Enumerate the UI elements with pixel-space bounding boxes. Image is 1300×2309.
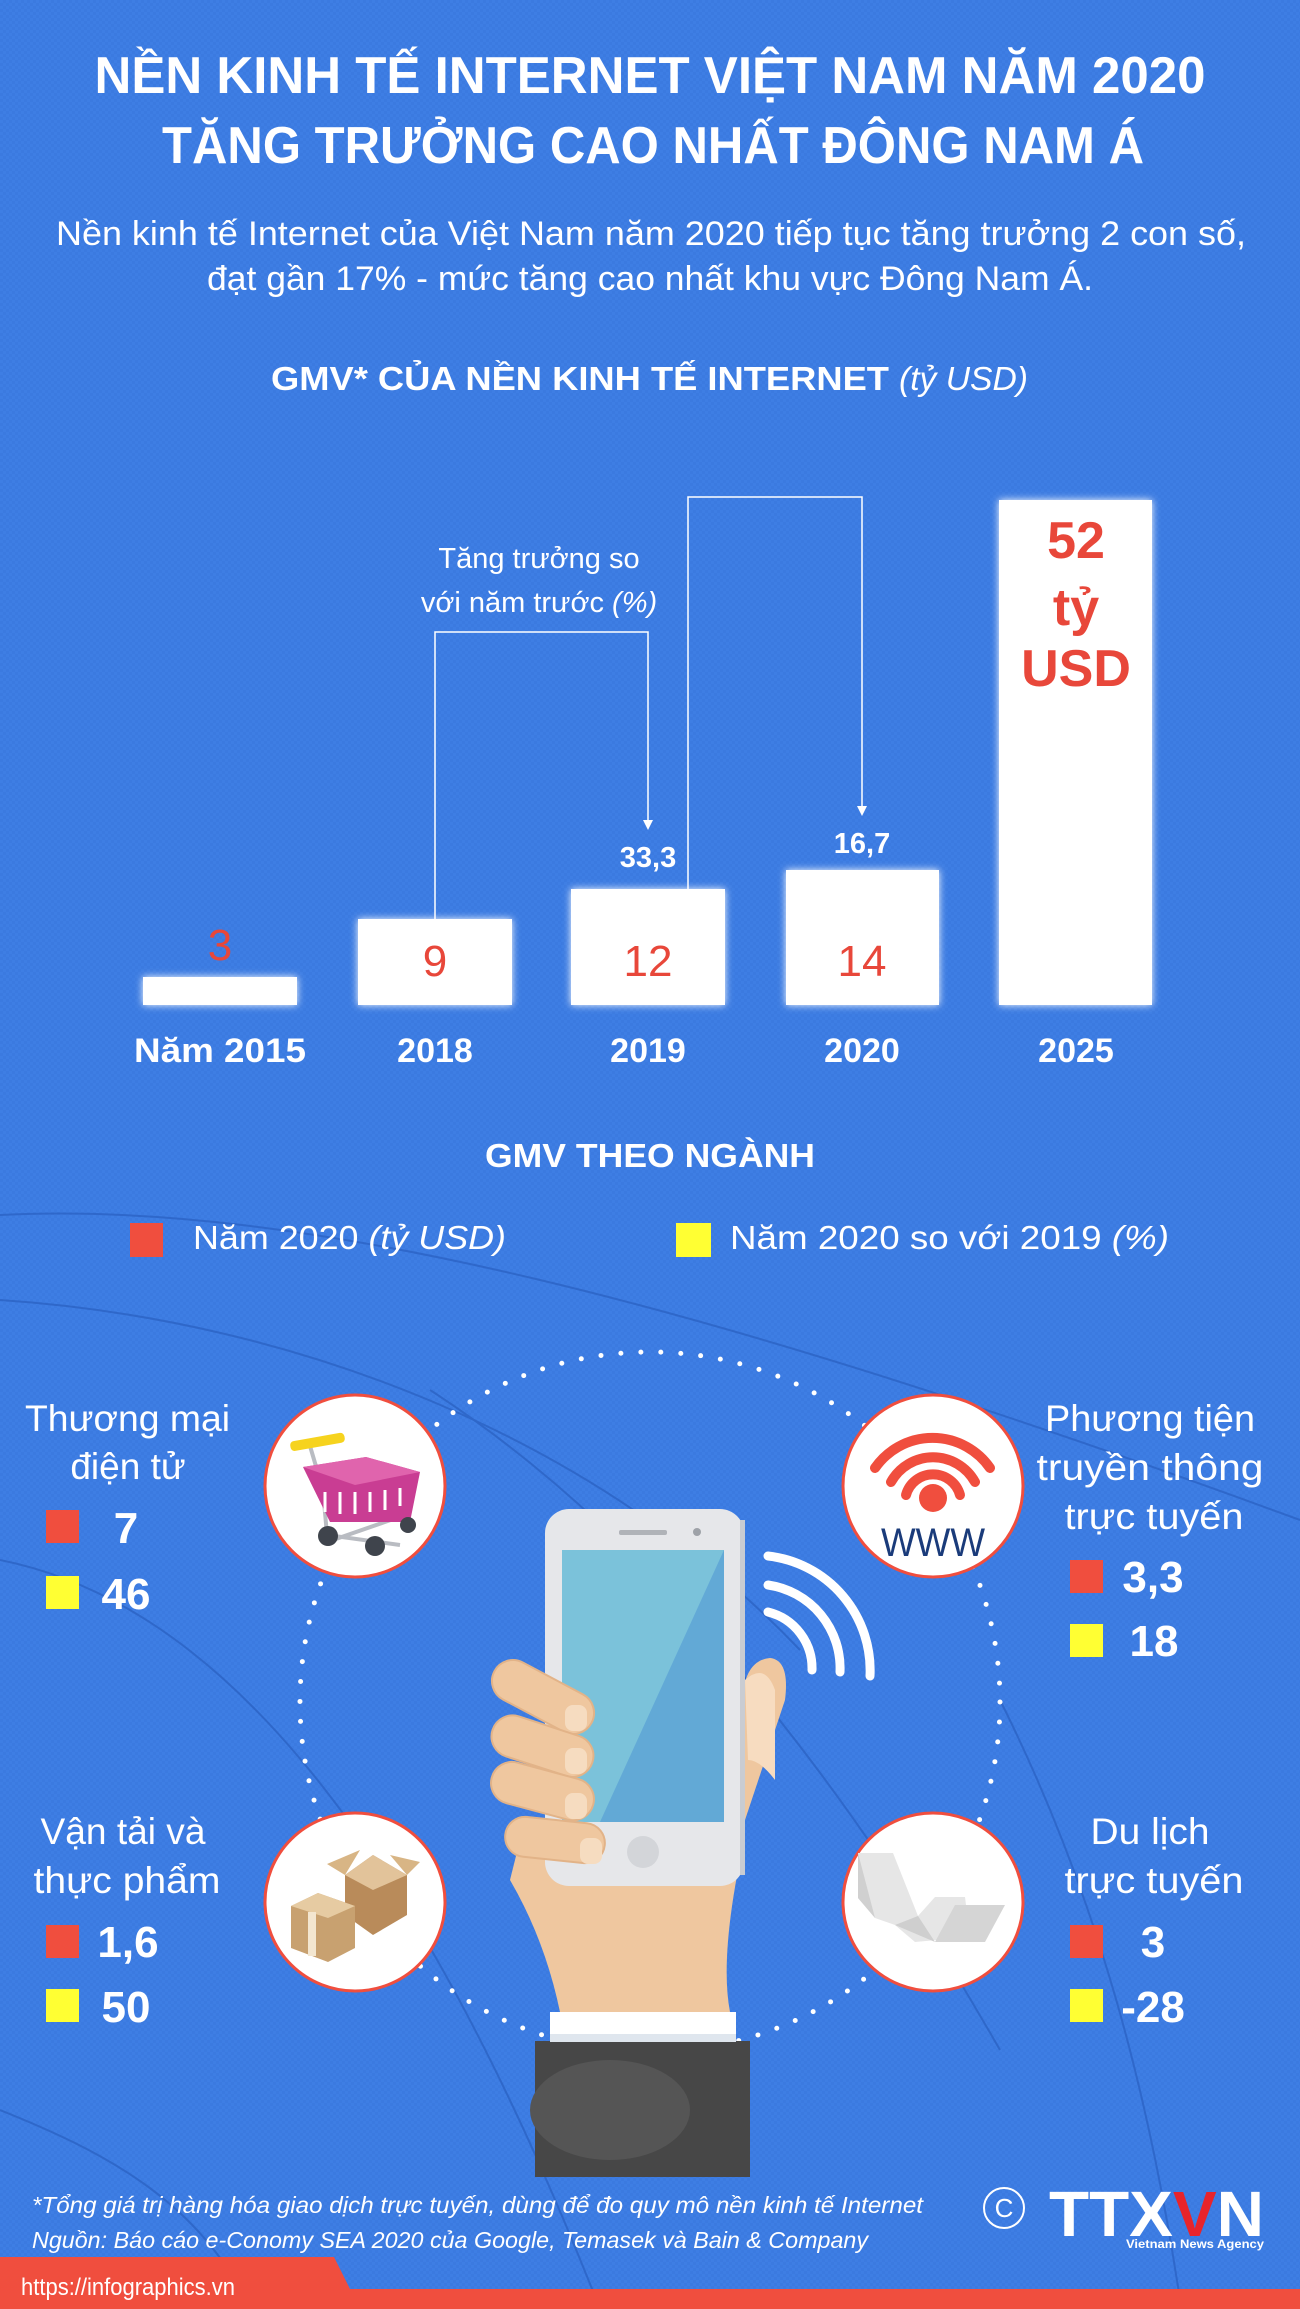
text block: Phương tiện truyền thông trực tuyến: Phương tiện [1045, 1398, 1255, 1439]
text block: Phương tiện truyền thông trực tuyến: 3,3 [1122, 1553, 1184, 1602]
bar chart: Năm 2015 [134, 1032, 306, 1070]
dotted circle [300, 1352, 1000, 2052]
icon: wifi www: WWW [881, 1521, 985, 1565]
cuff [550, 2012, 736, 2042]
palm [510, 1658, 786, 2012]
text block: Phương tiện truyền thông trực tuyến [1036, 1398, 1264, 1666]
text block: Du lịch trực tuyến: Du lịch [1090, 1811, 1210, 1852]
text block: Du lịch trực tuyến: 3 [1141, 1918, 1165, 1967]
chart title: (tỷ USD) [899, 360, 1028, 397]
sleeve [535, 2041, 750, 2177]
legend: Năm 2020 (tỷ USD) [193, 1219, 506, 1256]
text block: Du lịch trực tuyến [1064, 1811, 1244, 2032]
footnote and source [32, 2192, 925, 2253]
annotation: growth connectors [421, 497, 890, 919]
annotation: growth connectors: 33,3 [620, 842, 676, 874]
footnote and source: Nguồn: Báo cáo e-Conomy SEA 2020 của Google, Temasek và Bain & Company [32, 2227, 870, 2253]
logo: copyright and TTXVN: Vietnam News Agency [1126, 2237, 1264, 2251]
text block: Du lịch trực tuyến: trực tuyến [1064, 1860, 1244, 1901]
icon: shopping cart [265, 1395, 445, 1577]
bar chart: 2018 [397, 1032, 473, 1070]
annotation: growth connectors: 16,7 [834, 828, 890, 860]
text block: Thương mại điện tử: Thương mại [25, 1398, 230, 1439]
phone in hand [485, 1509, 870, 2177]
text block: Vận tải và thực phẩm [34, 1811, 220, 2032]
text block: Phương tiện truyền thông trực tuyến: trực tuyến [1064, 1496, 1244, 1537]
icon: travel map [843, 1813, 1023, 1991]
title: NỀN KINH TẾ INTERNET VIỆT NAM NĂM 2020 [94, 46, 1206, 105]
bar chart: 2020 [824, 1032, 900, 1070]
text block: Vận tải và thực phẩm: thực phẩm [34, 1860, 220, 1901]
text block: Phương tiện truyền thông trực tuyến: truyền thông [1036, 1447, 1264, 1488]
text block: Vận tải và thực phẩm: 1,6 [97, 1918, 159, 1967]
text block: Vận tải và thực phẩm: 50 [102, 1983, 150, 2032]
footnote and source: *Tổng giá trị hàng hóa giao dịch trực tuyến, dùng để đo quy mô nền kinh tế Internet [32, 2192, 925, 2218]
bar chart: 14 [838, 937, 886, 986]
fingers [485, 1653, 607, 1865]
annotation: growth connectors: với năm trước (%) [421, 587, 657, 619]
icon: wifi www [843, 1395, 1023, 1577]
bar chart [134, 500, 1152, 1070]
text block: Thương mại điện tử: 7 [114, 1504, 138, 1553]
bar chart: 2025 [1038, 1032, 1114, 1070]
bar chart: USD [1021, 640, 1131, 698]
legend: Năm 2020 so với 2019 (%) [730, 1219, 1169, 1256]
text block: Thương mại điện tử [25, 1398, 230, 1619]
phone [545, 1509, 744, 1886]
text block: Phương tiện truyền thông trực tuyến: 18 [1130, 1617, 1178, 1666]
subtitle: Nền kinh tế Internet của Việt Nam năm 2020 tiếp tục tăng trưởng 2 con số, [56, 215, 1246, 253]
title: TĂNG TRƯỞNG CAO NHẤT ĐÔNG NAM Á [162, 116, 1144, 175]
footer bar: https://infographics.vn [21, 2274, 235, 2301]
bar chart: 12 [624, 937, 672, 986]
bar chart: 9 [423, 937, 447, 986]
legend [130, 1219, 1169, 1257]
text block: Vận tải và thực phẩm: Vận tải và [40, 1811, 206, 1852]
title [94, 46, 1206, 175]
bar chart: tỷ [1053, 579, 1099, 637]
signal waves [768, 1556, 870, 1676]
footer bar [0, 2257, 1300, 2309]
bar chart: 52 [1047, 512, 1105, 570]
chart title: GMV* CỦA NỀN KINH TẾ INTERNET [271, 360, 889, 397]
section heading: GMV theo ngành: GMV THEO NGÀNH [485, 1137, 815, 1174]
subtitle [56, 215, 1246, 298]
text block: Du lịch trực tuyến: -28 [1121, 1983, 1185, 2032]
logo: copyright and TTXVN: C [995, 2193, 1013, 2223]
bar chart: 3 [208, 921, 232, 970]
text block: Thương mại điện tử: điện tử [70, 1446, 186, 1487]
annotation: growth connectors: Tăng trưởng so [438, 543, 640, 575]
bar chart: 2019 [610, 1032, 686, 1070]
logo: copyright and TTXVN: TTXVN [1049, 2178, 1264, 2250]
icon: boxes [265, 1813, 445, 1991]
text block: Thương mại điện tử: 46 [102, 1570, 150, 1619]
subtitle: đạt gần 17% - mức tăng cao nhất khu vực Đông Nam Á. [207, 260, 1093, 298]
